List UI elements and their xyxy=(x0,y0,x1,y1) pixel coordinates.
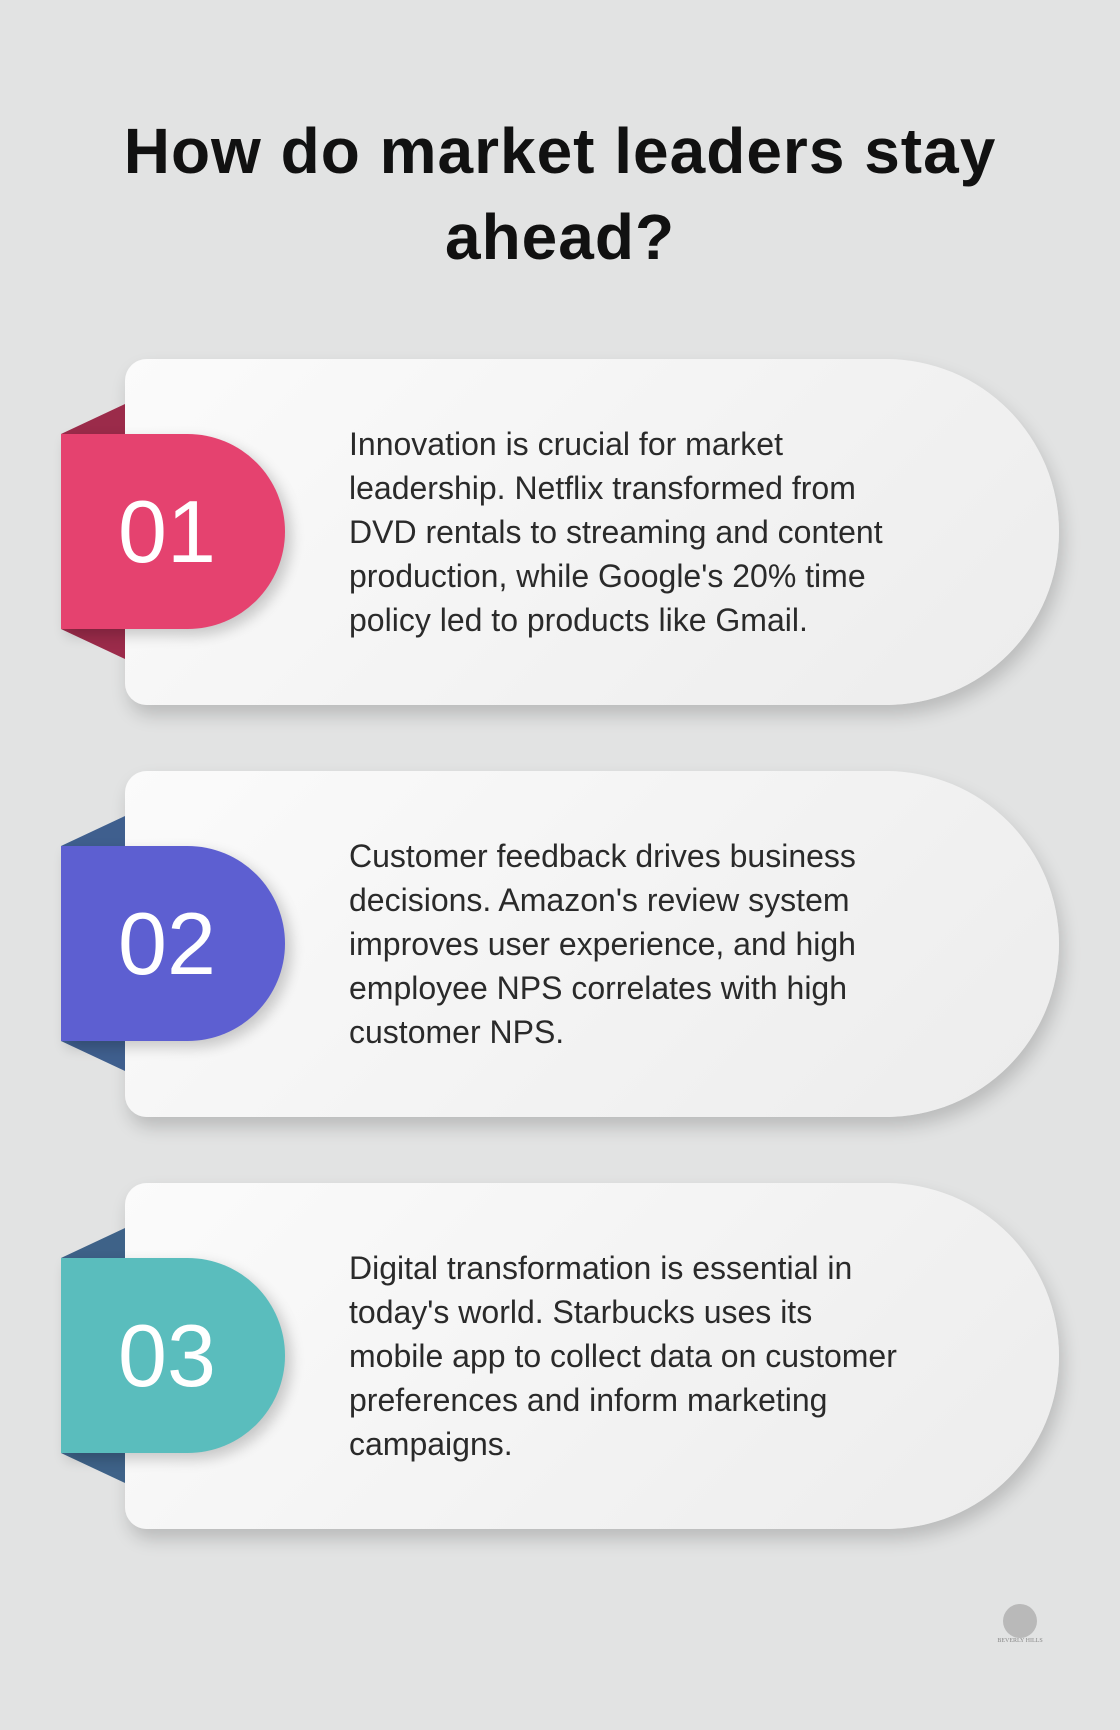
card 3 xyxy=(125,1183,1059,1529)
panel: item 3 xyxy=(61,1183,1070,1546)
badge 01: 01 xyxy=(118,482,216,581)
text 3: preferences and inform marketing xyxy=(349,1382,827,1418)
logo xyxy=(997,1604,1043,1644)
title: ahead? xyxy=(445,201,675,273)
text 1: policy led to products like Gmail. xyxy=(349,602,808,638)
badge 01 xyxy=(61,434,285,629)
text 2: Customer feedback drives business xyxy=(349,838,856,874)
text 1 xyxy=(349,426,883,638)
text 1: production, while Google's 20% time xyxy=(349,558,866,594)
panel: item 2 xyxy=(61,771,1070,1134)
text 2: improves user experience, and high xyxy=(349,926,856,962)
badge 03 xyxy=(61,1258,285,1453)
text 1: Innovation is crucial for market xyxy=(349,426,783,462)
panel: item 1 xyxy=(61,359,1070,722)
fold 2 xyxy=(61,816,125,1071)
text 3: mobile app to collect data on customer xyxy=(349,1338,897,1374)
card 2 xyxy=(125,771,1059,1117)
text 2 xyxy=(349,838,856,1050)
text 3: today's world. Starbucks uses its xyxy=(349,1294,812,1330)
badge 02: 02 xyxy=(118,894,216,993)
text 3: campaigns. xyxy=(349,1426,513,1462)
text 3: Digital transformation is essential in xyxy=(349,1250,852,1286)
text 1: leadership. Netflix transformed from xyxy=(349,470,856,506)
logo: BEVERLY HILLS xyxy=(997,1638,1043,1644)
text 1: DVD rentals to streaming and content xyxy=(349,514,883,550)
badge 03: 03 xyxy=(118,1306,216,1405)
text 2: customer NPS. xyxy=(349,1014,564,1050)
title: How do market leaders stay xyxy=(124,115,996,187)
fold 3 xyxy=(61,1228,125,1483)
fold 1 xyxy=(61,404,125,659)
badge 02 xyxy=(61,846,285,1041)
title xyxy=(124,115,996,273)
card 1 xyxy=(125,359,1059,705)
text 3 xyxy=(349,1250,897,1462)
text 2: decisions. Amazon's review system xyxy=(349,882,850,918)
text 2: employee NPS correlates with high xyxy=(349,970,847,1006)
